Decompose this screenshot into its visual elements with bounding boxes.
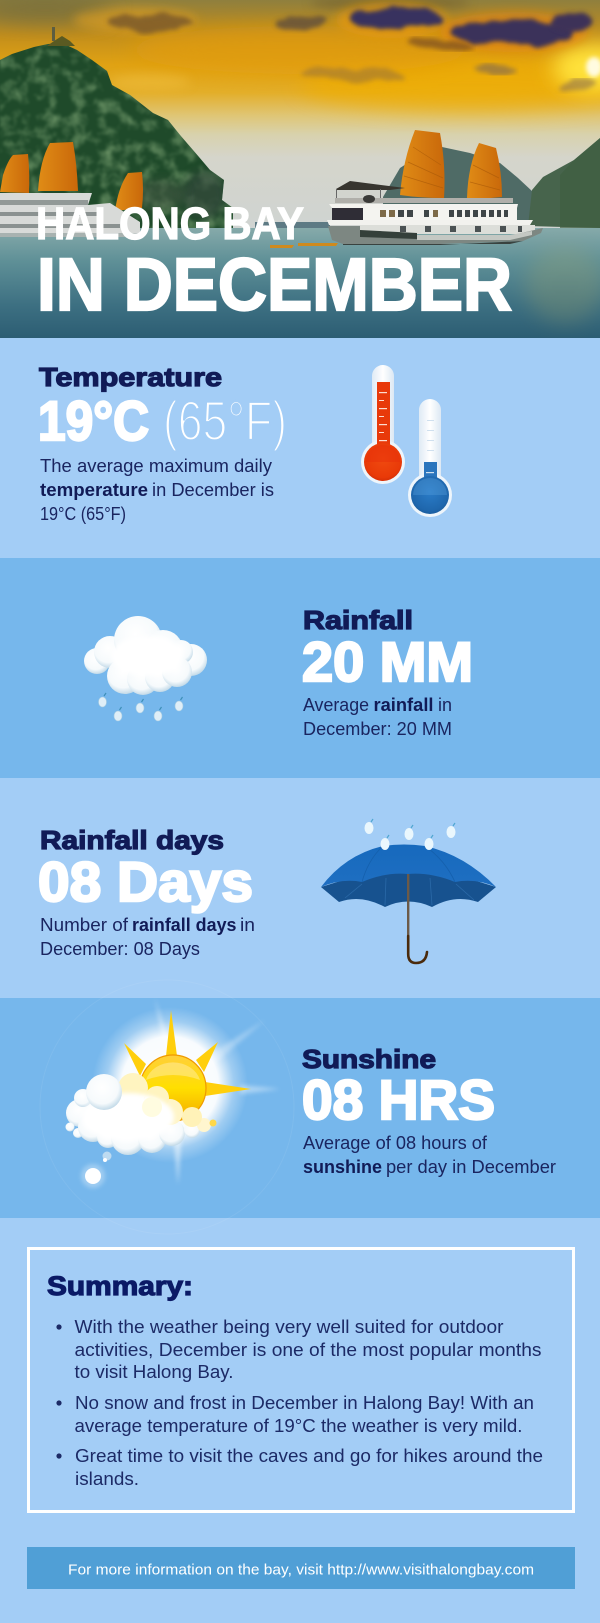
hero photo: Halong Bay junk boats at sunset (0, 0, 600, 338)
bullet: caves and hikes: Great time to visit the caves and go for hikes around the (75, 1446, 543, 1466)
heading: sunshine: Sunshine (302, 1044, 436, 1074)
heading: temperature: Temperature (39, 362, 222, 392)
footer text: For more information on the bay, visit http://www.visithalongbay.com (68, 1562, 534, 1578)
icon: umbrella (321, 819, 496, 963)
panel: temperature (0, 338, 600, 558)
value: 20 MM: 20 MM (302, 630, 473, 693)
panel: rainfall (0, 558, 600, 778)
description: rainfall days: rainfall days (132, 915, 236, 935)
value: 19°C: 19°C (38, 389, 149, 452)
description: rainfall: December: 20 MM (303, 719, 452, 739)
description: rainfall days: December: 08 Days (40, 939, 200, 959)
panel: rainfall days (0, 778, 600, 998)
title (36, 198, 512, 326)
value: 08 HRS: 08 HRS (302, 1068, 495, 1131)
title line: HALONG BAY: HALONG BAY (36, 198, 304, 249)
description: rainfall (303, 695, 452, 739)
description: temperature: temperature (40, 480, 148, 500)
bullet: no snow (56, 1393, 534, 1436)
description: rainfall days (40, 915, 255, 959)
description: temperature: The average maximum daily (40, 456, 272, 476)
description: temperature (40, 456, 274, 524)
heading: rainfall days: Rainfall days (40, 825, 224, 855)
description: sunshine: Average of 08 hours of (303, 1133, 488, 1153)
description: temperature: in December is (152, 480, 274, 500)
icon: thermometers (361, 365, 452, 517)
value: 65°F: (65°F) (163, 389, 287, 452)
description: sunshine (303, 1133, 556, 1177)
bullet: no snow: average temperature of 19°C the weather is very mild. (74, 1416, 522, 1436)
bullet: outdoor activities: activities, December is one of the most popular months (74, 1340, 542, 1360)
boat sails (400, 130, 502, 198)
icon: sun behind cloud (40, 980, 294, 1234)
title line: IN DECEMBER: IN DECEMBER (37, 243, 512, 326)
description: rainfall days: in (240, 915, 255, 935)
heading: rainfall: Rainfall (303, 605, 413, 635)
bullet: outdoor activities (56, 1317, 542, 1382)
footer bar (27, 1547, 575, 1589)
description: sunshine: per day in December (386, 1157, 556, 1177)
bullet: caves and hikes: islands. (75, 1469, 139, 1489)
description: rainfall days: Number of (40, 915, 129, 935)
icon: cloud (66, 1073, 216, 1155)
description: temperature: 19°C (65°F) (40, 504, 126, 524)
bullet: outdoor activities: to visit Halong Bay. (74, 1362, 234, 1382)
panel: sunshine (0, 980, 600, 1234)
value: 08 days: 08 Days (38, 850, 253, 913)
bullet: no snow: No snow and frost in December in Halong Bay! With an (75, 1393, 534, 1413)
icon: rain drops (364, 819, 456, 850)
panel: summary (28, 1248, 574, 1512)
icon: small light orb (81, 1152, 112, 1188)
bullet: outdoor activities: With the weather being very well suited for outdoor (74, 1317, 503, 1337)
description: rainfall: in (438, 695, 452, 715)
description: sunshine: sunshine (303, 1157, 382, 1177)
description: rainfall: rainfall (374, 695, 434, 715)
icon: rain cloud (84, 616, 207, 721)
description: rainfall: Average (303, 695, 369, 715)
heading: summary: Summary: (47, 1271, 193, 1301)
bullet: caves and hikes (56, 1446, 543, 1489)
